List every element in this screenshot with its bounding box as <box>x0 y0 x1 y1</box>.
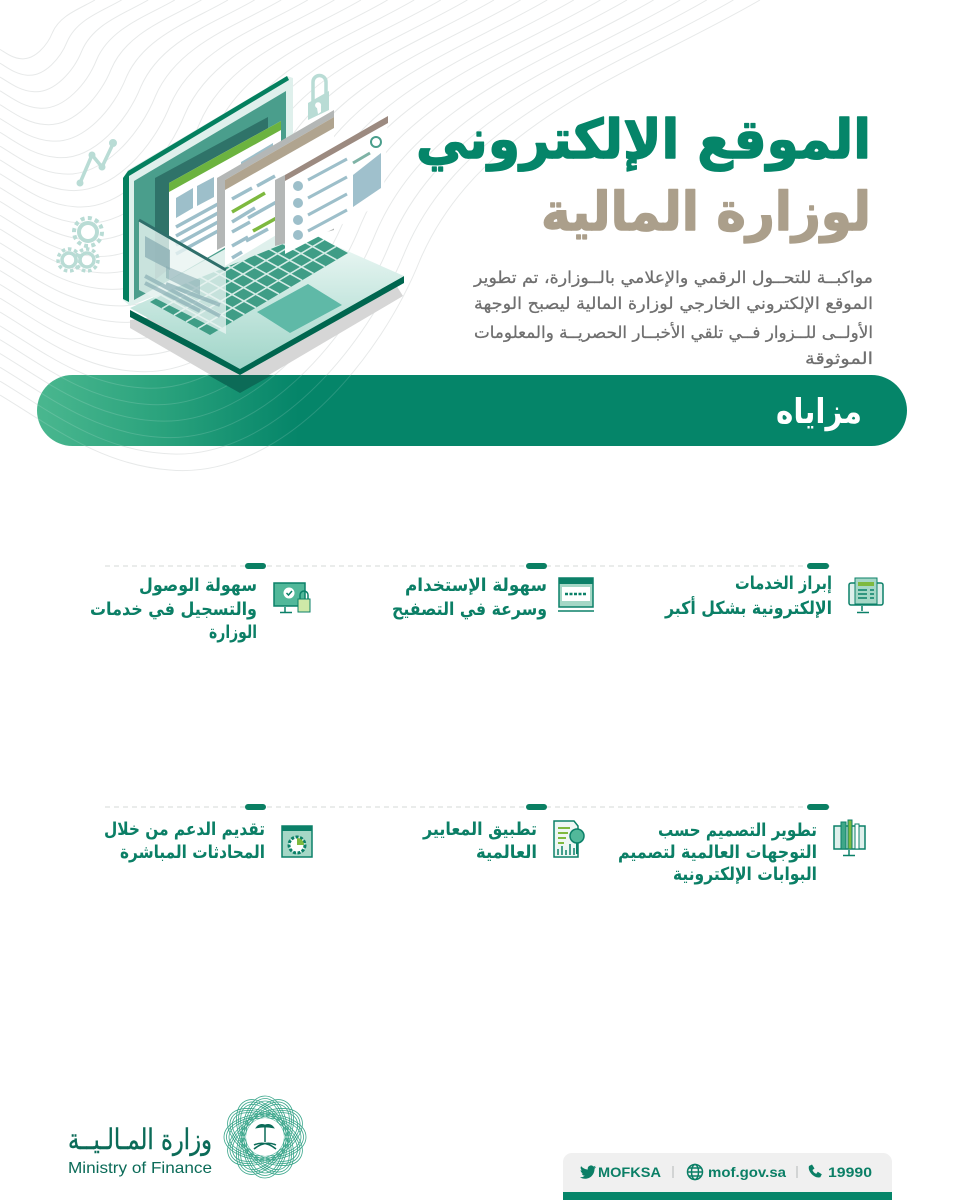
icon: report with magnifier <box>554 821 584 857</box>
feature: design development: التوجهات العالمية لتصميم <box>618 842 817 863</box>
intro paragraph <box>473 268 873 369</box>
intro paragraph: مواكبــة للتحــول الرقمي والإعلامي بالــوزارة، تم تطوير <box>473 268 873 288</box>
icon: monitor with list <box>849 578 883 612</box>
intro paragraph: الأولــى للــزوار فــي تلقي الأخبــار الحصريــة والمعلومات <box>474 322 873 343</box>
laptop screen <box>123 76 293 306</box>
laptop base <box>130 276 404 375</box>
title line 1: الموقع الإلكتروني <box>416 108 871 171</box>
feature: access and registration: الوزارة <box>209 622 257 643</box>
icon: monitor with design tools <box>834 820 865 856</box>
logo emblem rosette <box>218 1090 312 1184</box>
icon: padlock <box>308 76 329 120</box>
advantages banner <box>37 375 907 446</box>
window: front shadow <box>275 150 334 246</box>
window: green <box>169 121 281 280</box>
laptop shadow <box>130 285 403 392</box>
background wave lines <box>0 0 760 471</box>
feature: electronic services <box>664 573 883 619</box>
feature: global standards: تطبيق المعايير <box>422 819 537 840</box>
feature: design development: تطوير التصميم حسب <box>658 820 817 841</box>
feature: access and registration: سهولة الوصول <box>139 575 257 596</box>
icon: monitor with lock <box>274 583 310 612</box>
icon: browser with gear <box>282 826 312 857</box>
intro paragraph: الموثوقة <box>805 349 873 369</box>
feature: design development: البوابات الإلكترونية <box>673 864 817 885</box>
intro paragraph: الموقع الإلكتروني الخارجي لوزارة المالية ليصبح الوجهة <box>474 294 873 314</box>
feature: access and registration: والتسجيل في خدمات <box>90 599 257 620</box>
window: glass overlay <box>139 220 226 334</box>
banner heading: مزاياه <box>776 392 862 432</box>
icon: twitter <box>580 1165 596 1179</box>
feature: electronic services: الإلكترونية بشكل أكبر <box>664 596 832 619</box>
icon: phone <box>809 1164 822 1177</box>
icon: network graph <box>77 140 116 186</box>
feature: live support <box>104 819 312 863</box>
feature: live support: المحادثات المباشرة <box>120 842 265 863</box>
feature: access and registration <box>90 575 310 643</box>
feature: ease of use: سهولة الإستخدام <box>405 575 547 596</box>
phone number: 19990 <box>828 1164 872 1180</box>
feature: ease of use <box>392 575 594 620</box>
contact footer <box>563 1153 892 1200</box>
keyboard <box>150 220 348 335</box>
trackpad <box>257 284 342 333</box>
twitter handle: MOFKSA <box>598 1164 661 1180</box>
icon: globe <box>688 1164 702 1180</box>
logo: Ministry of Finance <box>68 1090 312 1184</box>
window: tan <box>225 117 334 266</box>
feature: ease of use: وسرعة في التصفيح <box>392 599 547 620</box>
feature: electronic services: إبراز الخدمات <box>735 573 832 594</box>
window: middle shadow <box>217 110 334 250</box>
feature row 1 <box>90 563 883 643</box>
logo English name: Ministry of Finance <box>68 1160 212 1177</box>
feature row 2 <box>104 804 865 885</box>
feature: live support: تقديم الدعم من خلال <box>104 819 265 840</box>
window: front <box>285 116 388 254</box>
laptop shadow tip <box>208 375 272 393</box>
icon: gears <box>58 218 102 271</box>
logo Arabic name: وزارة المـالـيــة <box>68 1123 212 1156</box>
website: mof.gov.sa <box>708 1164 786 1180</box>
laptop illustration <box>58 76 404 392</box>
title line 2: لوزارة المالية <box>541 182 871 243</box>
feature: global standards <box>422 819 584 863</box>
feature: design development <box>618 820 865 885</box>
feature: global standards: العالمية <box>476 842 537 863</box>
title <box>416 108 871 243</box>
icon: browser www <box>558 578 594 611</box>
